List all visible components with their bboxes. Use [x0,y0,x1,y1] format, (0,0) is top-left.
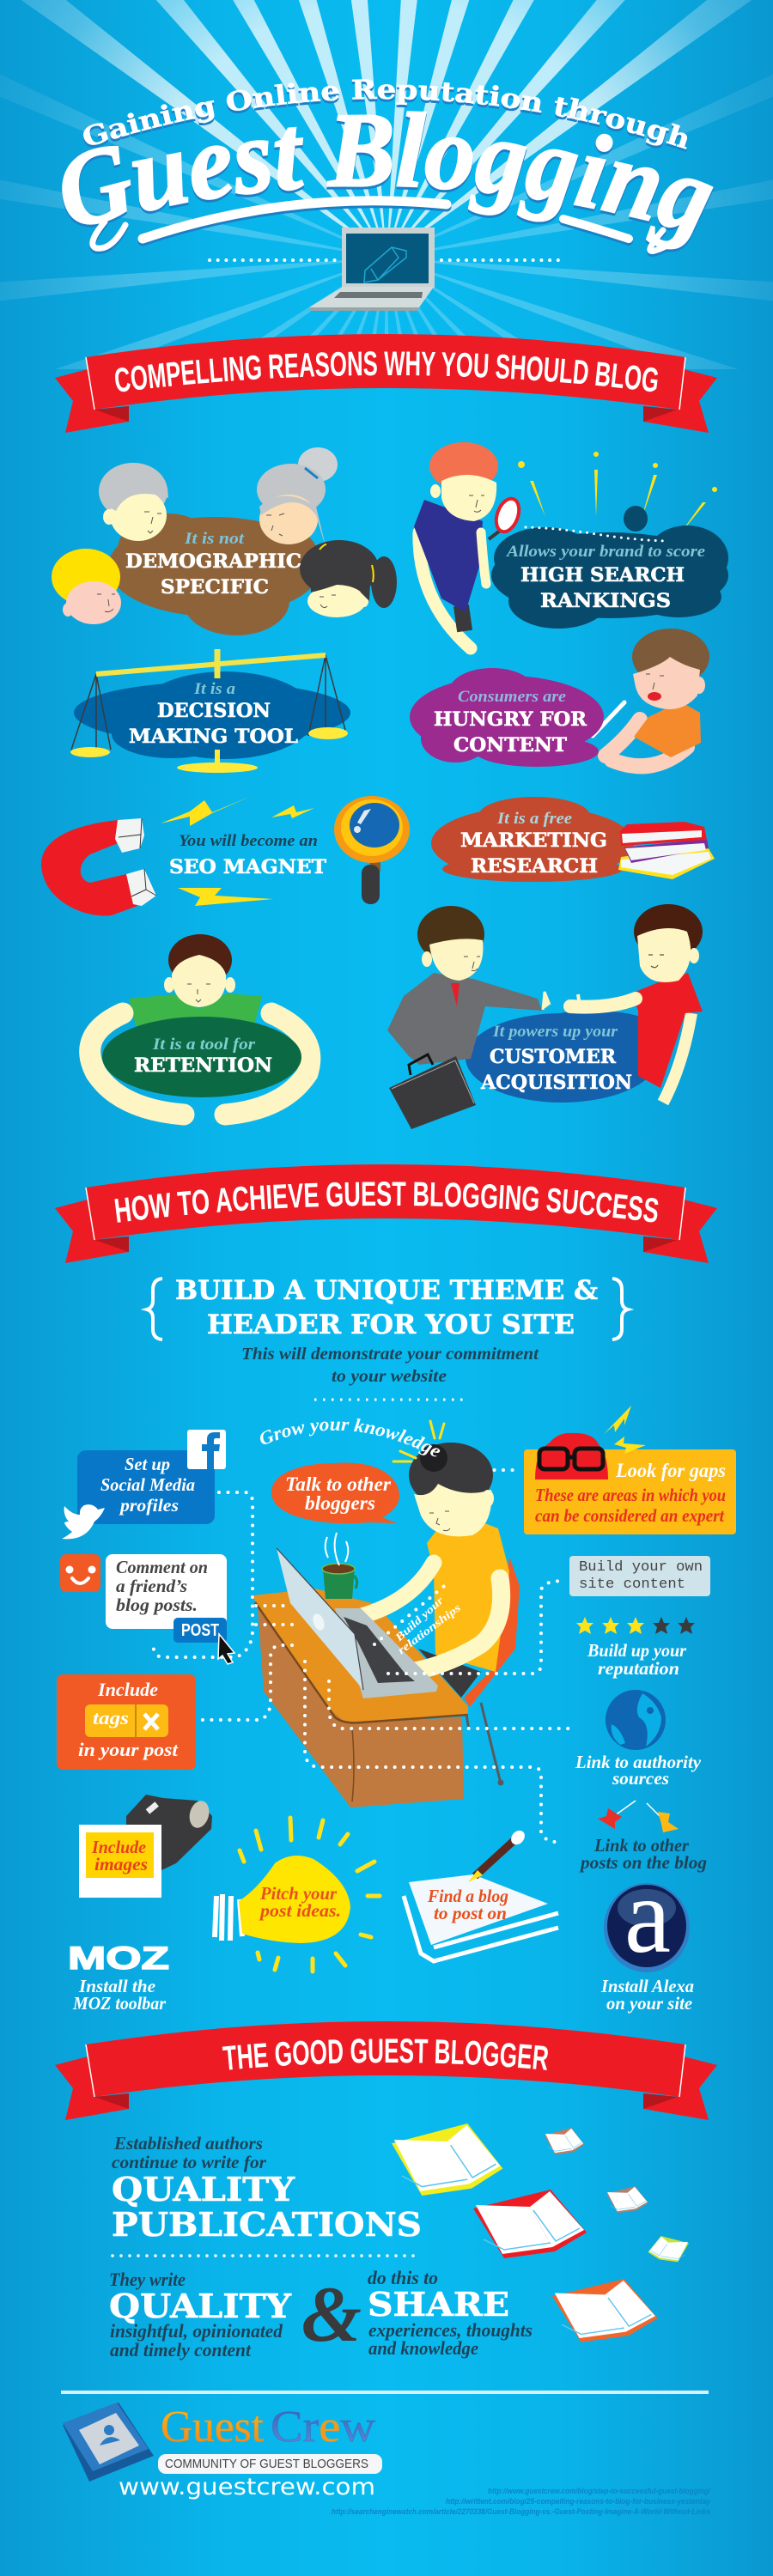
text: MOZ toolbar [72,1993,167,2014]
cloud [108,513,321,635]
text: CONTENT [453,734,568,756]
speech bubble: talk to other bloggers [271,1462,399,1523]
text: HUNGRY FOR [434,708,587,731]
text: do this to share: and knowledge [368,2337,478,2359]
magnifier [489,495,523,539]
cloud [431,797,634,882]
panel: authority sources [575,1690,702,1789]
ribbon: how to achieve [55,1164,717,1263]
text: a friend’s [116,1576,187,1596]
dots beside laptop [210,258,558,262]
text: RETENTION [134,1054,272,1077]
panel: look for gaps [524,1406,736,1534]
text: MAKING TOOL [129,726,298,748]
sources [332,2487,711,2516]
title: swash right [563,219,629,239]
bulb rays [240,1818,380,1971]
text: RESEARCH [471,855,598,878]
text: they write quality: and timely content [110,2339,252,2360]
sparks over head [393,1421,444,1461]
text: they write quality: insightful, opinionated [110,2320,283,2342]
magnet [41,818,156,916]
text: Set up [125,1454,170,1474]
panel: demographic [52,447,397,635]
magnifier [334,796,410,904]
tagline pill: COMMUNITY OF GUEST BLOGGERS [165,2457,368,2471]
text: ACQUISITION [480,1072,632,1094]
text: reputation [598,1658,679,1679]
text: Include [91,1837,146,1857]
books [392,2123,689,2342]
text: on your site [606,1993,692,2014]
mug [322,1533,357,1599]
text: SPECIFIC [161,576,269,598]
text: build relationships [392,1593,463,1656]
wordmark: Crew [271,2403,375,2451]
icon: logo book [63,2403,154,2482]
ribbon: compelling reasons [55,334,717,433]
curved text: grow your knowledge: Grow your knowledge [260,1419,440,1456]
lightning [161,796,314,906]
panel: moz [68,1941,169,2014]
girl [300,540,397,617]
footer divider [61,2391,709,2394]
panel: comment [60,1554,234,1664]
panel: link to other posts [579,1801,707,1873]
tag: tags [93,1707,129,1728]
businessman [387,906,550,1065]
text: commitment: This will demonstrate your commitment [241,1345,540,1364]
text: RANKINGS [540,590,671,612]
bolts [604,1406,646,1454]
connector: top dots [314,1398,466,1401]
title [62,79,714,257]
grandfather [99,463,168,541]
nerd head [535,1433,608,1479]
speech bubble: talk to other bloggers: Talk to other [285,1473,392,1495]
text: Look for gaps [615,1460,726,1481]
briefcase [389,1054,476,1129]
book small top [545,2128,584,2154]
paper stack [404,1874,558,1961]
ribbon heading: THE GOOD GUEST BLOGGER [222,2038,548,2070]
text: they write quality: QUALITY [109,2287,292,2325]
icon: globe [606,1690,666,1750]
text: It is a [193,680,236,698]
stars [576,1617,695,1634]
text: post ideas. [259,1900,341,1921]
button [173,1618,227,1643]
sources: http://searchenginewatch.com/article/2270338/Guest-Blogging-vs.-Guest-Posting-Imagine-A-World-Without-Links [332,2507,710,2516]
panel: find a blog [404,1828,558,1961]
text: profiles [119,1495,179,1516]
text: site content [579,1577,685,1593]
text: BUILD A UNIQUE THEME & [175,1275,598,1306]
text: Comment on [116,1557,208,1577]
text: quality publications: continue to write for [112,2152,267,2172]
title: letter tails [93,199,703,251]
ribbon heading: HOW TO ACHIEVE GUEST BLOGGING SUCCESS [114,1182,658,1223]
text: Link to authority [575,1752,702,1772]
bulb [239,1856,350,1943]
book orange [552,2279,658,2342]
title: swash left [143,201,447,239]
panel: reputation [576,1617,695,1679]
book small mid [606,2186,648,2213]
text: they write quality: They write [109,2269,186,2290]
panel: social media [62,1430,226,1539]
icon: cursor [218,1634,234,1664]
dots [526,527,666,541]
searching boy [414,442,498,648]
ampersand: & [301,2270,362,2358]
wordmark: Guest [161,2403,265,2451]
text: do this to share: SHARE [368,2285,509,2324]
dotted connectors over desk [192,1581,572,1843]
fork [593,702,624,736]
text: Allows your brand to score [506,543,706,561]
icon: twitter [62,1504,105,1539]
speech bubble: talk to other bloggers: bloggers [305,1492,375,1514]
panel: include tags [57,1674,196,1770]
sources: http://www.guestcrew.com/blog/step-to-successful-guest-blogging/ [488,2487,711,2495]
icon: camera [126,1795,212,1870]
text: CUSTOMER [490,1046,617,1068]
text: images [94,1854,148,1874]
heading: unique theme [147,1275,628,1340]
text: do this to share: do this to [368,2267,438,2288]
logo: MOZ [68,1941,169,1976]
text: they write quality [109,2269,292,2360]
text: Link to other [593,1835,690,1856]
yellow sparks [518,452,717,535]
text: quality publications: PUBLICATIONS [112,2205,422,2244]
icon: facebook [187,1430,226,1469]
panel: marketing research [431,797,715,882]
text: quality publications: QUALITY [112,2170,295,2208]
hugging man [90,934,310,1115]
left brace [147,1279,162,1340]
text: commitment [241,1345,540,1386]
book yellow [392,2123,502,2196]
bulb base [215,1894,242,1941]
text: You will become an [179,832,318,850]
icon: smile [60,1554,100,1592]
title: subtitle: Gaining Online Reputation through [83,79,687,152]
panel: customer acquisition [387,904,703,1129]
text: It powers up your [492,1023,618,1041]
cloud [102,1017,301,1097]
text: in your post [78,1739,179,1760]
scale [70,649,348,773]
text: posts on the blog [579,1852,707,1873]
book red [473,2190,587,2258]
student [362,1443,509,1698]
text: Find a blog [427,1886,508,1906]
pencil [468,1828,527,1882]
text: to post on [434,1903,507,1923]
customer [570,904,703,1103]
panel: hungry for content [410,629,709,767]
icon: pins [598,1801,679,1832]
text: Build your own [579,1559,703,1576]
text: sources [612,1768,669,1789]
panel: SEO magnet [41,796,410,916]
panel: high search rankings [414,442,728,648]
blond boy [52,549,121,624]
text: DEMOGRAPHIC [125,550,301,573]
tag [85,1704,168,1737]
title: main: Guest Blogging [62,111,714,252]
text: HEADER FOR YOU SITE [207,1309,575,1340]
text: It is a free [496,810,573,828]
desk [253,1589,468,1807]
panel: pitch ideas bulb [215,1818,380,1971]
logo: guest crew [63,2403,382,2500]
cloud [410,668,604,767]
text: quality publications: Established authors [113,2133,263,2154]
text: blog posts. [116,1595,198,1615]
cloud [74,671,350,759]
panel: include images [79,1795,212,1898]
laptop [277,1548,438,1698]
text: Social Media [100,1474,195,1495]
logo [604,1857,690,1976]
boy eating [606,629,709,766]
text: These are areas in which you [535,1485,726,1505]
text: quality publications [112,2133,422,2244]
text: HIGH SEARCH [520,564,685,586]
icon: laptop with pencil [309,228,435,311]
panel: retention [90,934,310,1115]
books [618,822,715,879]
logo: a [624,1857,671,1976]
text: SEO MAGNET [169,856,327,878]
dotted connectors [153,1470,515,1657]
text: do this to share: experiences, thoughts [368,2319,533,2341]
sources: http://writtent.com/blog/25-compelling-reasons-to-blog-for-business-yesterday [446,2497,711,2506]
text: do this to share [368,2267,533,2359]
text: Build up your [587,1640,687,1661]
book small lime [648,2236,689,2262]
text: It is a tool for [152,1036,256,1054]
grandmother [257,447,338,550]
text: Pitch your [259,1883,338,1904]
divider dots [113,2254,415,2257]
text: Install the [78,1976,155,1996]
right brace [612,1279,628,1340]
text: can be considered an expert [535,1505,725,1526]
ribbon heading: COMPELLING REASONS WHY YOU SHOULD BLOG [115,351,658,392]
text: Consumers are [458,688,567,706]
panel: site content [569,1556,710,1596]
panel: decision making tool [70,649,350,773]
text: It is not [184,530,245,548]
button: POST [181,1621,219,1640]
text: build relationships: relationships [395,1601,463,1656]
text: commitment: to your website [332,1367,447,1386]
text: build relationships: Build your [392,1593,447,1644]
text: MARKETING [460,829,607,852]
text: Include [97,1679,158,1700]
panel: alexa [600,1857,694,2014]
text: DECISION [157,700,271,722]
ribbon: good guest blogger [55,2021,717,2120]
cloud [491,506,728,629]
chair [464,1557,520,1786]
cloud [466,1011,658,1103]
text: Install Alexa [600,1976,694,1996]
url: www.guestcrew.com [119,2474,375,2500]
